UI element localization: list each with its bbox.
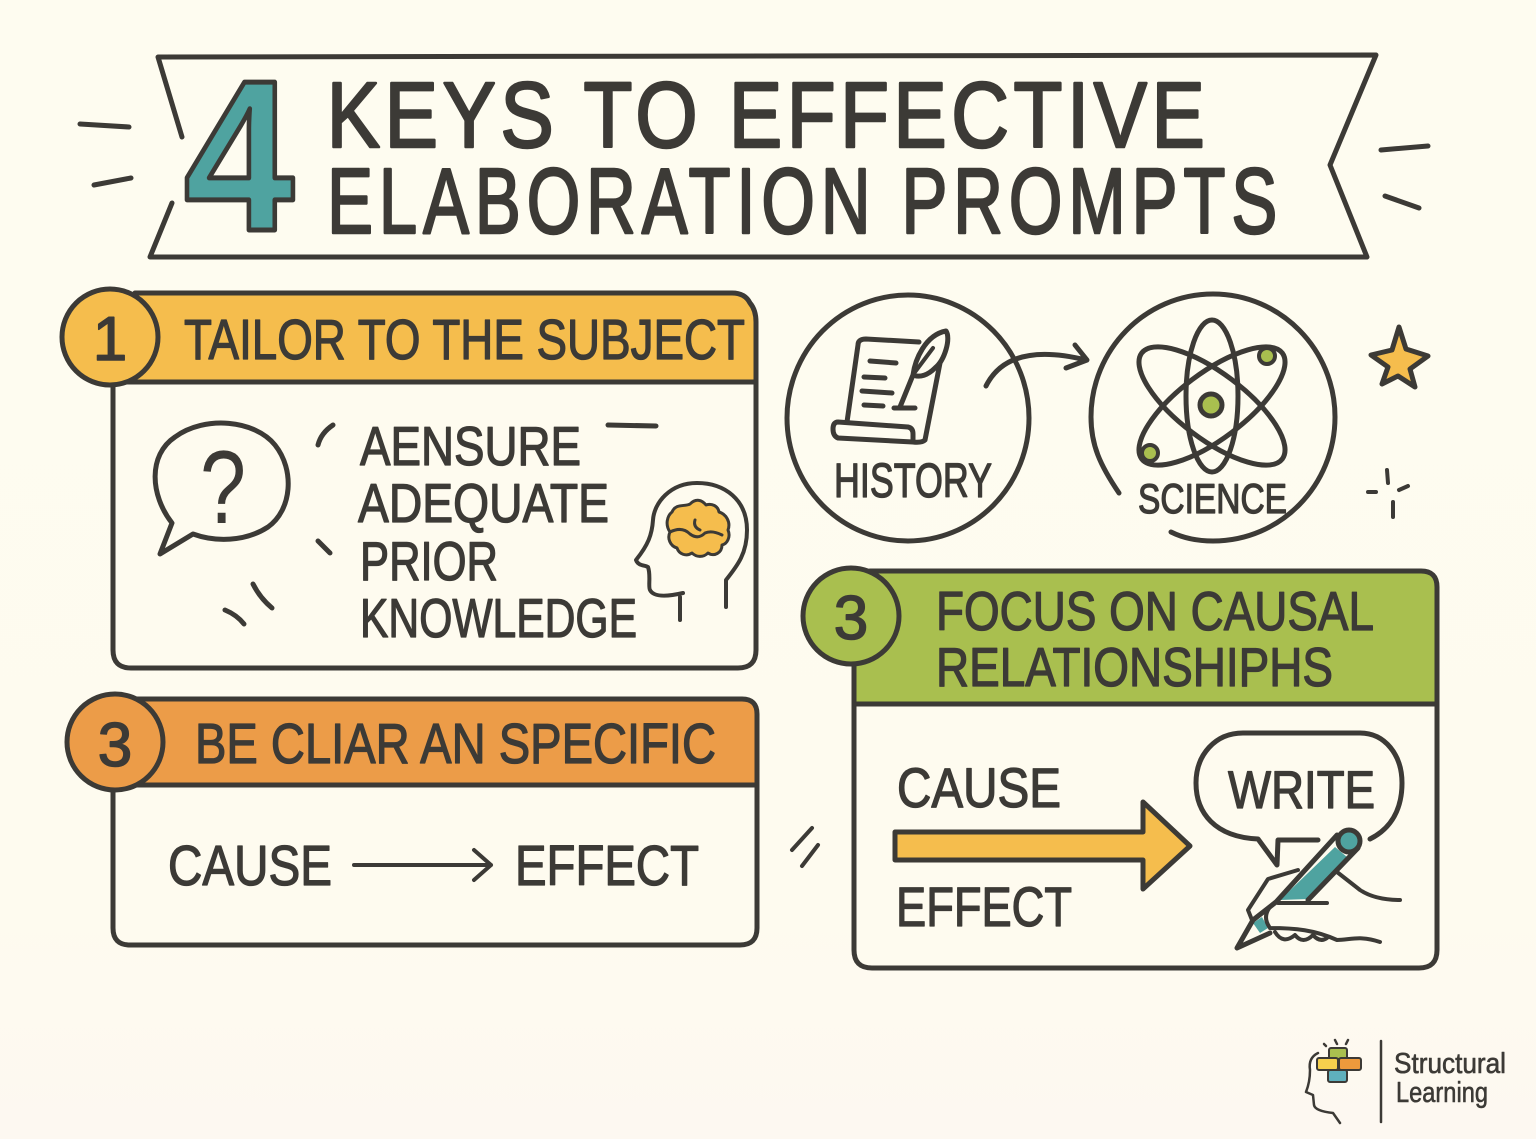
body text [358, 415, 637, 649]
logo wordmark: Structural [1394, 1048, 1506, 1080]
label: cause: CAUSE [897, 756, 1061, 819]
panel body [113, 785, 757, 945]
panel: focus on causal relationships [803, 568, 1437, 968]
label: effect: EFFECT [515, 834, 699, 898]
title accent ticks [80, 124, 1428, 208]
logo: structural learning [1306, 1040, 1506, 1123]
panel: tailor to the subject [62, 289, 756, 668]
sparkle accent [1368, 470, 1408, 517]
speech bubble: write [1196, 733, 1402, 865]
body text: AENSURE [360, 415, 581, 477]
title number 4: 4 [184, 35, 294, 276]
panel heading [936, 580, 1374, 698]
icon: question speech bubble: ? [200, 430, 246, 546]
number badge 3 [803, 568, 899, 664]
panel header [113, 699, 757, 785]
logo wordmark [1394, 1048, 1506, 1109]
accent ticks between panels [792, 828, 818, 866]
speech bubble: write: WRITE [1228, 761, 1375, 820]
panel header [113, 293, 756, 382]
arrow: yellow cause to effect [895, 802, 1190, 889]
icon: scroll and quill [833, 331, 948, 442]
panel body [854, 704, 1437, 968]
panel heading: FOCUS ON CAUSAL [936, 580, 1374, 642]
body text: ADEQUATE [358, 472, 609, 534]
label: science: SCIENCE [1138, 475, 1287, 522]
logo divider [1380, 1041, 1382, 1122]
icon: hand writing with pen [1237, 830, 1400, 948]
arrow: history to science [986, 345, 1087, 386]
panel body [113, 382, 756, 668]
number badge 3 [67, 694, 163, 790]
logo head outline [1306, 1040, 1348, 1123]
title line 2: ELABORATION PROMPTS [327, 150, 1277, 253]
label: history: HISTORY [834, 455, 992, 508]
number badge 1 [62, 289, 158, 385]
icon: science circle [1091, 294, 1335, 541]
number badge 3: 3 [834, 584, 868, 653]
label: effect: EFFECT [896, 875, 1072, 938]
title line 1: KEYS TO EFFECTIVE [327, 63, 1205, 167]
body text: KNOWLEDGE [360, 587, 637, 649]
panel heading: BE CLIAR AN SPECIFIC [195, 712, 716, 776]
panel heading: RELATIONSHIPHS [936, 636, 1333, 698]
icon: star [1371, 327, 1428, 387]
icon: question speech bubble [155, 423, 288, 554]
accent ticks [225, 425, 656, 624]
body text: PRIOR [360, 530, 498, 592]
title banner [150, 35, 1376, 276]
icon: history circle [787, 295, 1029, 541]
number badge 3: 3 [98, 711, 132, 780]
number badge 1: 1 [93, 305, 127, 374]
panel header [854, 571, 1437, 704]
logo wordmark: Learning [1396, 1077, 1488, 1109]
arrow: cause to effect [354, 850, 491, 880]
logo blocks [1317, 1048, 1361, 1082]
panel heading: TAILOR TO THE SUBJECT [184, 308, 745, 372]
panel: be clear and specific [67, 694, 757, 945]
icon: head with brain [636, 483, 747, 620]
label: cause: CAUSE [168, 834, 332, 898]
icon: atom [1122, 320, 1302, 485]
